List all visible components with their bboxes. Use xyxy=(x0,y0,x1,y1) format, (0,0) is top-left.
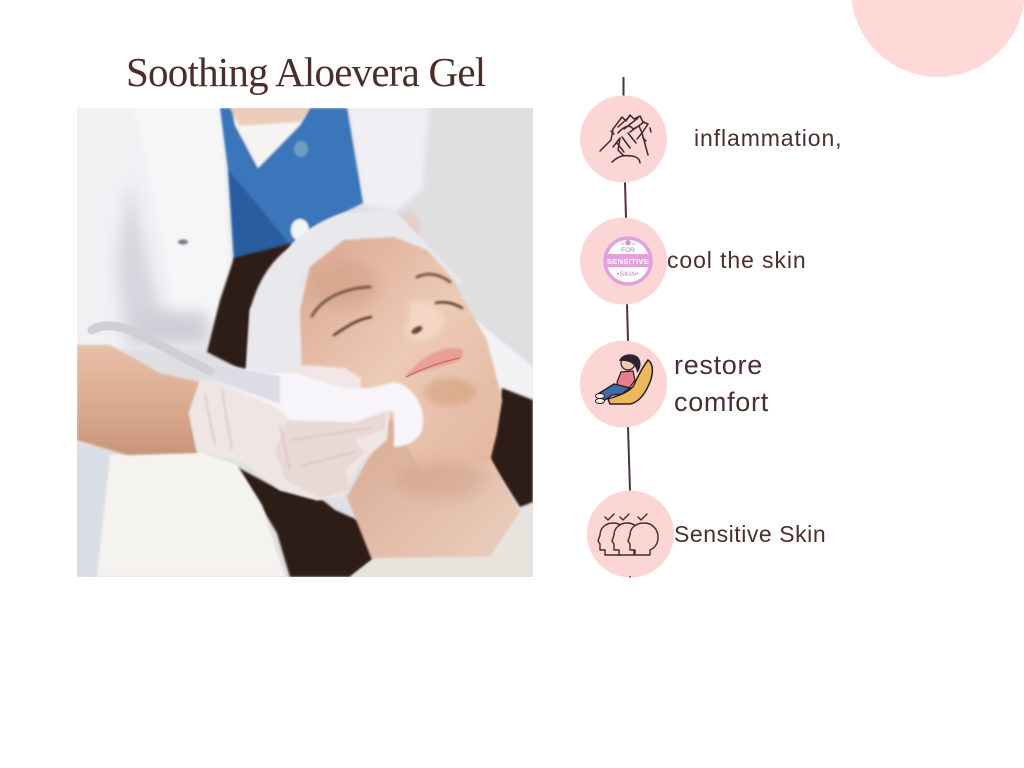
decorative corner circle xyxy=(851,0,1024,77)
step 4 label: Sensitive Skin xyxy=(674,521,826,547)
step 3 circle with relaxing woman in chair icon xyxy=(580,340,667,428)
step 2 circle with sensitive skin badge: FOR xyxy=(621,247,635,254)
neck shadow xyxy=(395,460,485,500)
cheek warmth xyxy=(311,261,379,309)
step 2 circle with sensitive skin badge: •SKIN• xyxy=(617,271,639,278)
step 4 circle with three heads and checkmarks icon xyxy=(587,490,674,578)
nose xyxy=(406,300,445,341)
title: Soothing Aloevera Gel xyxy=(126,49,485,95)
step 2 circle with sensitive skin badge xyxy=(580,218,667,304)
cable xyxy=(92,326,210,371)
blurred hand behind headband xyxy=(396,211,420,239)
step 1 circle with hands icon xyxy=(580,96,667,182)
step 1 label: inflammation, xyxy=(694,125,842,151)
gloved hand xyxy=(189,365,390,500)
pillow xyxy=(464,310,533,402)
headband xyxy=(246,210,462,372)
white towel under arm xyxy=(97,452,285,577)
neck xyxy=(347,400,520,560)
step 3 label: restore xyxy=(674,350,763,380)
eyebrows and eyes xyxy=(312,274,462,335)
step 2 circle with sensitive skin badge: SENSITIVE xyxy=(607,257,649,266)
face xyxy=(300,237,502,500)
photo: aesthetician treating a client's face with a device xyxy=(77,108,533,577)
device handpiece xyxy=(209,363,423,447)
step 3 label xyxy=(674,350,769,417)
towel at chest xyxy=(350,503,533,577)
lips xyxy=(405,348,463,377)
coat shadow folds xyxy=(116,180,210,345)
lavender sheet under glove xyxy=(320,495,362,522)
chin shadow xyxy=(424,378,476,406)
step 2 label: cool the skin xyxy=(667,247,807,273)
step 3 label: comfort xyxy=(674,387,769,417)
hair xyxy=(207,243,533,577)
arm xyxy=(77,345,200,455)
blue scrubs xyxy=(178,108,363,262)
white lab coat xyxy=(60,100,430,585)
